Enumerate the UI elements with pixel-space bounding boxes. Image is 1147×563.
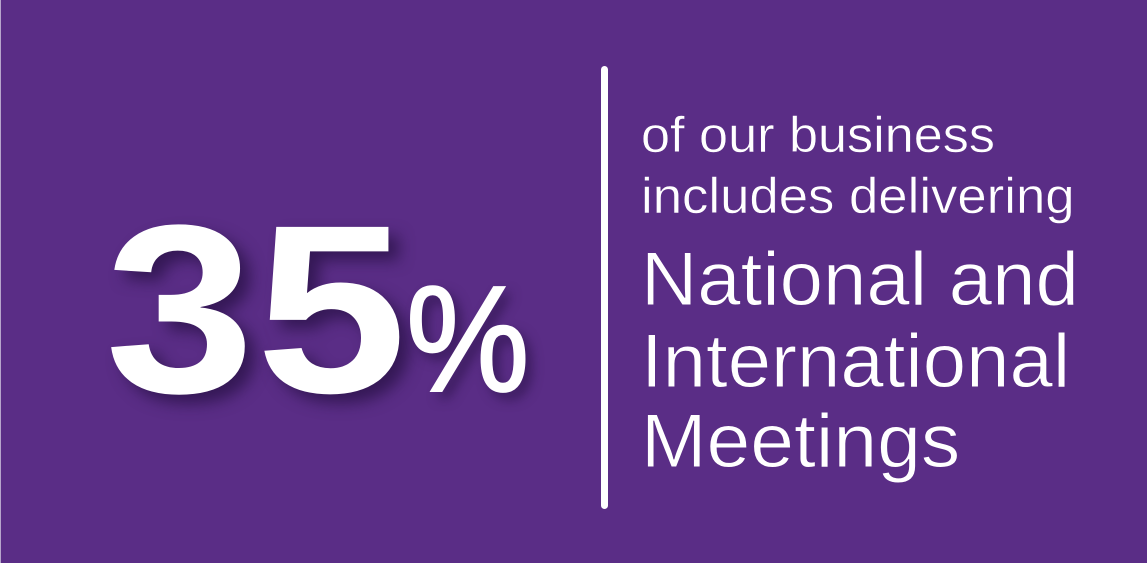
left edge highlight (0, 0, 1, 563)
highlighted text: National and International Meetings: National and (641, 237, 1079, 322)
vertical divider (601, 66, 608, 509)
percent sign: % (406, 254, 530, 423)
figure 35 (105, 175, 416, 443)
intro text: includes delivering (641, 168, 1075, 224)
figure 35: 5 (256, 175, 407, 443)
intro text (641, 107, 1075, 224)
figure 35: 3 (105, 175, 255, 443)
highlighted text: National and International Meetings (641, 237, 1079, 484)
highlighted text: National and International Meetings: Meetings (641, 399, 960, 484)
highlighted text: National and International Meetings: International (641, 319, 1070, 404)
big number: 35 percent (105, 175, 537, 443)
intro text: of our business (641, 107, 995, 163)
